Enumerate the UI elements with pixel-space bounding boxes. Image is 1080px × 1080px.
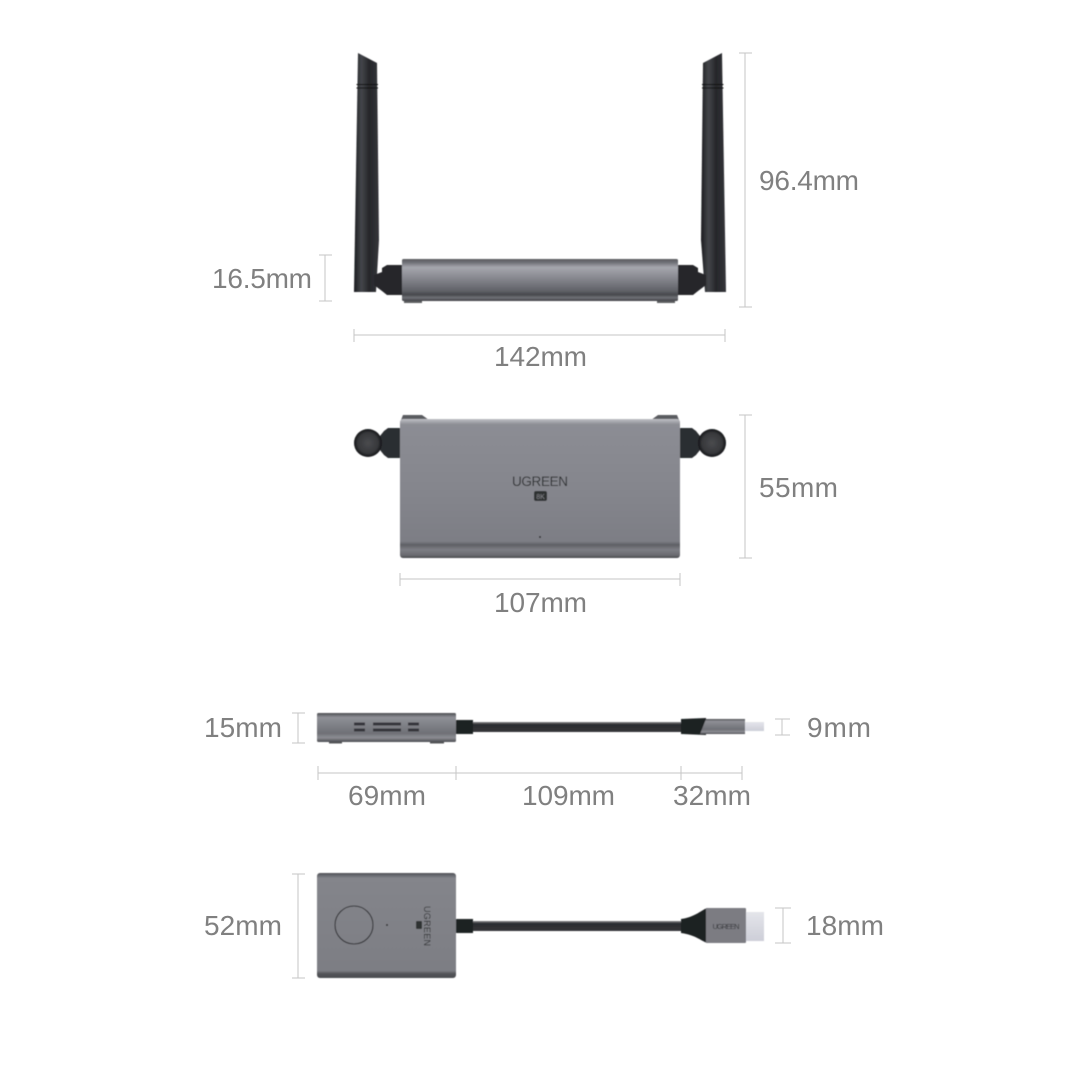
strain relief <box>456 720 473 734</box>
device body <box>402 259 678 301</box>
metal plug <box>706 908 746 943</box>
plug tip <box>746 912 764 941</box>
logo: UGREEN: UGREEN <box>512 474 568 489</box>
metal plug: UGREEN <box>712 922 740 931</box>
receiver body <box>317 873 456 978</box>
cable <box>456 722 682 732</box>
icon: 8K badge: 8K <box>536 494 545 501</box>
metal plug <box>700 719 745 734</box>
dimension: 107mm: 107mm <box>494 587 587 618</box>
icon: LED dot <box>386 924 388 926</box>
dimension: 15mm: 15mm <box>204 712 282 743</box>
dimension: 9mm: 9mm <box>807 712 871 743</box>
icon: 8K badge <box>534 491 547 501</box>
icon: ports <box>354 722 419 732</box>
dimension: length row <box>318 766 751 811</box>
dimension: 107mm <box>400 573 680 618</box>
dimension: 96.4mm height: 96.4mm <box>759 165 859 196</box>
dimension: 55mm: 55mm <box>759 472 838 503</box>
device: top view <box>354 415 726 558</box>
icon: 8K badge <box>416 921 422 929</box>
dimension: 16.5mm: 16.5mm <box>212 263 312 294</box>
dimension: 55mm <box>739 415 838 558</box>
icon: button circle <box>335 906 373 944</box>
icon: body feet <box>404 300 675 303</box>
cable <box>456 921 682 931</box>
icon: right antenna <box>701 53 726 292</box>
icon: right ball joint <box>680 428 726 458</box>
dimension: 142mm: 142mm <box>494 341 587 372</box>
dimension: 18mm: 18mm <box>806 910 884 941</box>
logo: UGREEN rotated: UGREEN <box>422 906 432 946</box>
plug tip <box>745 722 764 731</box>
dimension: 16.5mm <box>212 255 332 301</box>
icon: feet <box>329 741 444 744</box>
icon: top tabs <box>401 415 679 420</box>
dimension: 18mm <box>775 908 884 943</box>
icon: left ball joint <box>354 428 400 458</box>
icon: right hinge <box>678 265 706 295</box>
dimension: 52mm <box>204 874 305 978</box>
dimension: length row: 69mm <box>348 780 426 811</box>
dimension: 52mm: 52mm <box>204 910 282 941</box>
strain relief <box>456 919 473 933</box>
device plate <box>400 419 680 558</box>
device: receiver side view <box>317 713 764 744</box>
icon: LED dot <box>539 536 541 538</box>
connector collar <box>681 718 706 735</box>
dimension: 142mm <box>354 329 725 372</box>
receiver body <box>317 713 456 742</box>
device: front view with antennas <box>354 53 726 303</box>
connector boot <box>681 908 707 943</box>
dimension: 9mm <box>775 712 871 743</box>
device: receiver top view <box>317 873 764 978</box>
icon: left antenna <box>354 53 379 292</box>
icon: left hinge <box>374 265 402 295</box>
dimension: length row: 109mm <box>522 780 615 811</box>
dimension: 96.4mm height <box>739 53 859 307</box>
dimension: length row: 32mm <box>673 780 751 811</box>
